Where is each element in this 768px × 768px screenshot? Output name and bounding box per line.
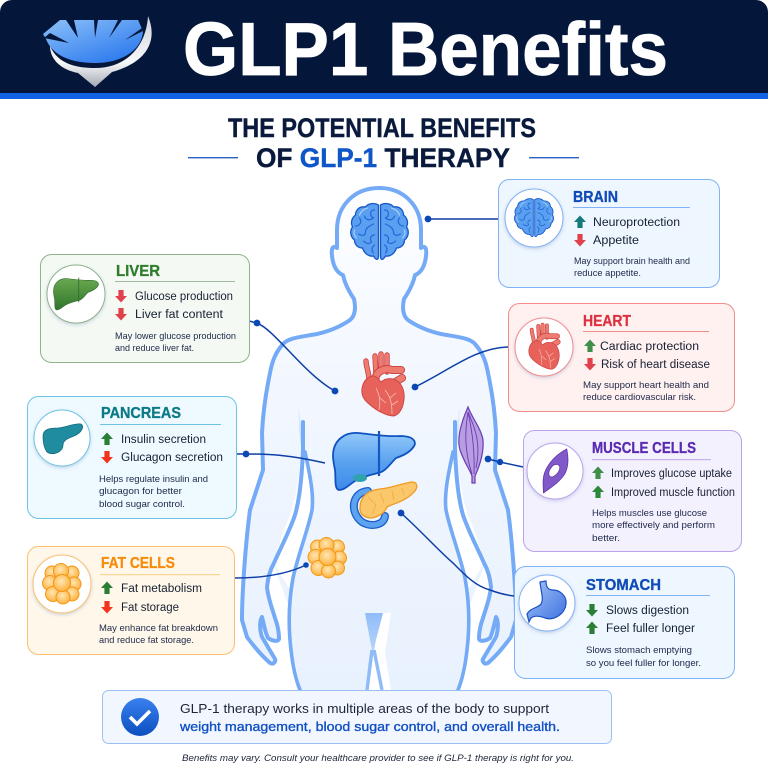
subtitle: THE POTENTIAL BENEFITS [228, 113, 536, 143]
connector lines [235, 216, 523, 596]
panel: stomach: Slows digestion [606, 605, 689, 617]
panel: heart: May support heart health and [583, 380, 709, 391]
icon: heart organ [362, 354, 404, 416]
panel: brain: BRAIN [573, 189, 618, 206]
panel: stomach [514, 566, 734, 678]
panel: liver: LIVER [116, 263, 160, 280]
icon: fat cells organ [308, 538, 346, 578]
panel: pancreas [28, 396, 236, 518]
panel: heart: Cardiac protection [600, 341, 699, 353]
subtitle [188, 113, 579, 173]
callout: summary banner [102, 690, 612, 744]
panel: liver: May lower glucose production [115, 331, 236, 342]
panel: muscle cells: more effectively and perform [592, 520, 715, 531]
panel: fat cells: FAT CELLS [101, 555, 175, 572]
panel: liver: Liver fat content [135, 309, 224, 321]
panel: muscle cells: Improved muscle function [611, 487, 735, 499]
panel: pancreas: Glucagon secretion [121, 452, 223, 464]
callout: summary banner: weight management, blood sugar control, and overall health. [179, 719, 560, 734]
main title: GLP1 Benefits [183, 7, 668, 91]
subtitle: OF GLP-1 THERAPY [256, 143, 510, 173]
callout: summary banner: GLP-1 therapy works in multiple areas of the body to support [180, 701, 549, 716]
panel: liver: and reduce liver fat. [115, 343, 194, 354]
panel: pancreas: glucagon for better [99, 486, 182, 497]
panel: heart: HEART [583, 313, 631, 330]
panel: muscle cells: Helps muscles use glucose [592, 508, 707, 519]
panel: fat cells: Fat metabolism [121, 583, 202, 595]
panel: brain: Appetite [593, 235, 639, 247]
panel: heart [508, 304, 734, 412]
panel: pancreas: PANCREAS [101, 405, 181, 422]
panel: brain: May support brain health and [574, 256, 690, 267]
panel: brain: reduce appetite. [574, 268, 641, 279]
icon: muscle organ [459, 407, 483, 483]
panel: fat cells: and reduce fat storage. [99, 635, 194, 646]
icon: check mark [121, 698, 159, 736]
panel: stomach: Feel fuller longer [606, 623, 695, 635]
panel: pancreas: Helps regulate insulin and [99, 474, 208, 485]
panel: liver: Glucose production [135, 291, 233, 303]
panel: stomach: Slows stomach emptying [586, 645, 692, 656]
panel: muscle cells: better. [592, 533, 620, 544]
panel: fat cells: Fat storage [121, 602, 179, 614]
panel: muscle cells [524, 430, 742, 552]
header band [0, 0, 768, 99]
human body figure [242, 188, 516, 690]
panel: stomach: so you feel fuller for longer. [586, 658, 701, 669]
panel: pancreas: Insulin secretion [121, 434, 206, 446]
panel: brain: Neuroprotection [593, 217, 680, 229]
panel: stomach: STOMACH [586, 577, 661, 594]
panel: brain [498, 180, 720, 288]
footnote: Benefits may vary. Consult your healthcare provider to see if GLP-1 therapy is right for you. [182, 753, 574, 763]
panel: muscle cells: MUSCLE CELLS [592, 440, 696, 457]
icon: liver organ [333, 431, 415, 490]
panel: heart: reduce cardiovascular risk. [583, 392, 696, 403]
panel: muscle cells: Improves glucose uptake [611, 468, 732, 480]
panel: liver [40, 254, 250, 362]
icon: logo gem [43, 16, 152, 87]
panel: heart: Risk of heart disease [601, 359, 710, 371]
panel: fat cells [28, 546, 234, 654]
panel: pancreas: blood sugar control. [99, 499, 185, 510]
icon: pancreas organ [354, 482, 417, 525]
panel: fat cells: May enhance fat breakdown [99, 623, 218, 634]
icon: brain organ [351, 204, 408, 259]
